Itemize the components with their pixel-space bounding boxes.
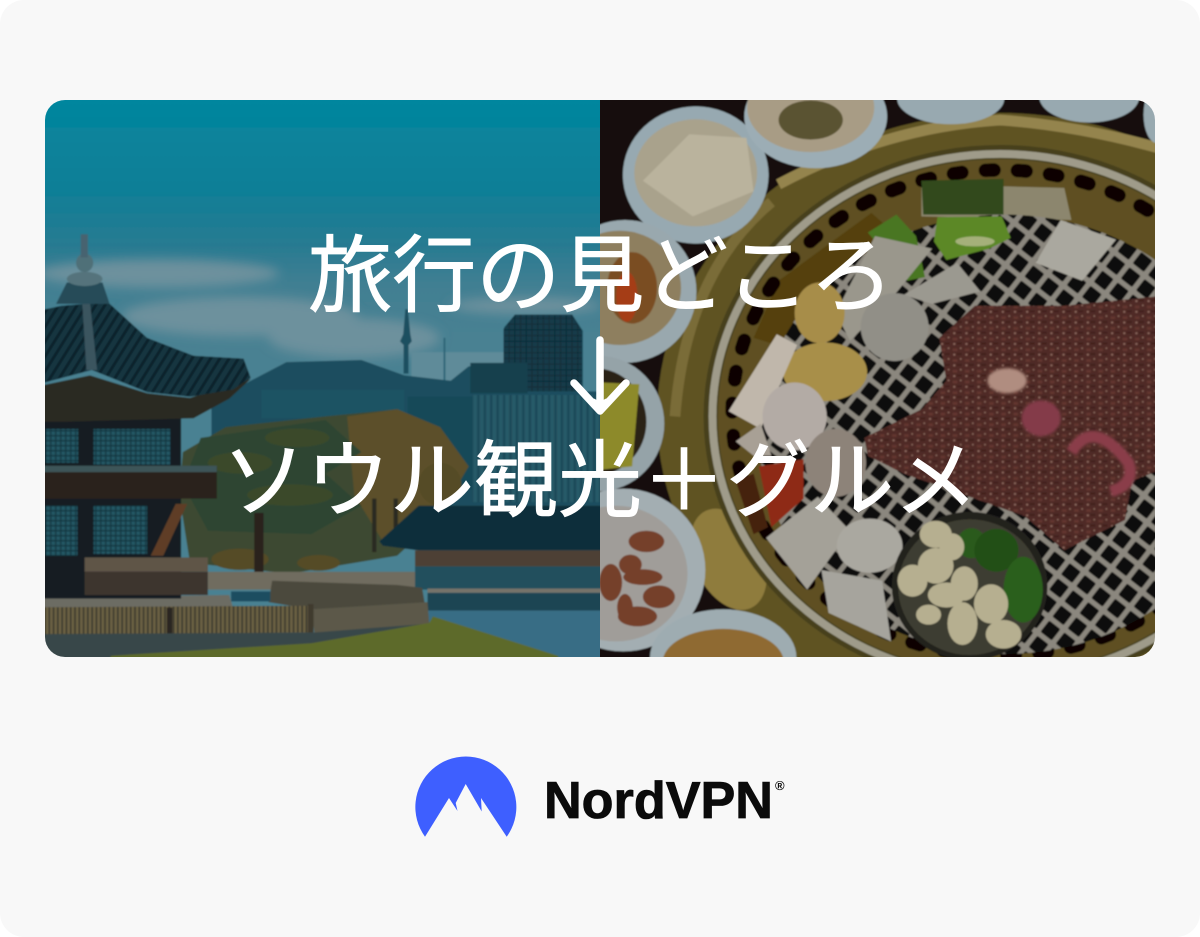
onion and vegetable pieces [729, 220, 1116, 641]
NordVPN logo [415, 757, 785, 837]
small bowl of garlic and jalapeno [892, 512, 1047, 660]
photo: Seoul sightseeing with palace pavilion and skyline [45, 100, 600, 657]
grilled beef [863, 296, 1155, 552]
arrow: ↓ [588, 361, 612, 417]
green peppers [868, 179, 1011, 281]
title: line 1: 旅行の見どころ [308, 229, 894, 323]
registered mark: ® [775, 778, 785, 793]
banchan side dish bowls [600, 100, 1155, 657]
title: line 2: ソウル観光＋グルメ [222, 434, 978, 528]
wordmark: NordVPN [544, 772, 773, 830]
icon: mountain badge [415, 757, 516, 837]
arrow [574, 340, 626, 417]
photo: Korean barbecue grill with side dishes [600, 100, 1155, 657]
